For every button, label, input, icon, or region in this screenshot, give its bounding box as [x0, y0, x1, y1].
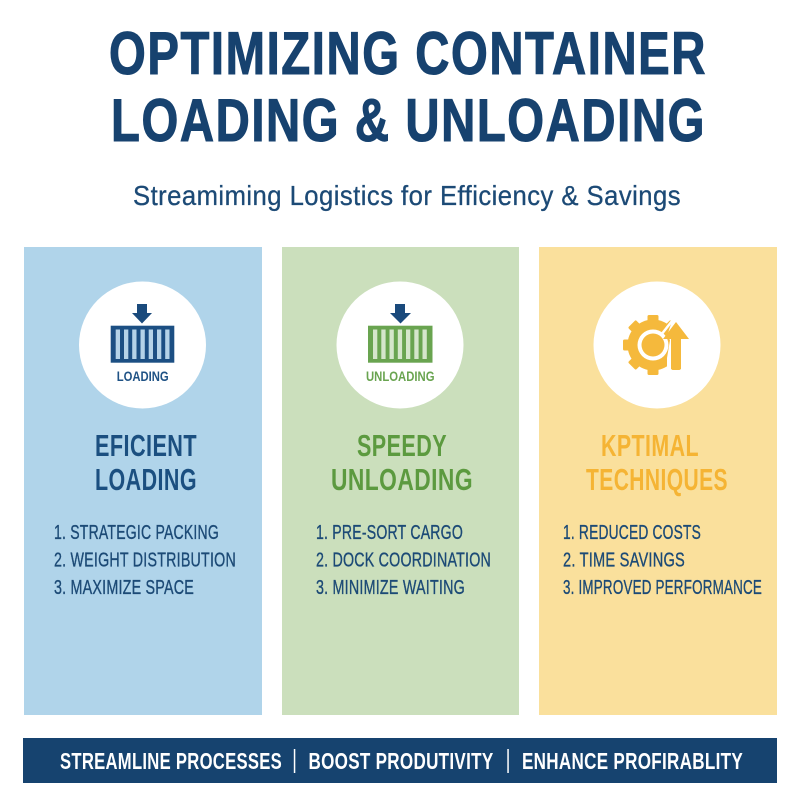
- icon: unloading container: UNLOADING: [366, 368, 435, 384]
- panel: speedy unloading: [282, 247, 519, 715]
- heading: speedy unloading: SPEEDY: [357, 429, 447, 463]
- icon: loading container: [79, 282, 206, 408]
- title: [109, 20, 707, 154]
- list: unloading steps: [316, 522, 491, 599]
- heading: optimal techniques: KPTIMAL: [601, 429, 699, 463]
- subtitle: Streamiming Logistics for Efficiency & Savings: [133, 180, 681, 211]
- list: optimal steps: [563, 522, 762, 599]
- icon: unloading container: [336, 282, 464, 408]
- list: unloading steps: 2. DOCK COORDINATION: [316, 550, 491, 572]
- heading: efficient loading: [95, 429, 197, 497]
- panel: efficient loading: [24, 247, 262, 715]
- icon: loading container: LOADING: [117, 368, 169, 384]
- banner: STREAMLINE PROCESSES: [60, 748, 282, 774]
- list: unloading steps: 3. MINIMIZE WAITING: [316, 577, 465, 599]
- banner: BOOST PRODUTIVITY: [308, 748, 494, 774]
- list: optimal steps: 1. REDUCED COSTS: [563, 522, 701, 544]
- list: loading steps: [54, 522, 236, 599]
- heading: speedy unloading: UNLOADING: [331, 463, 473, 497]
- list: unloading steps: 1. PRE-SORT CARGO: [316, 522, 463, 544]
- heading: optimal techniques: [586, 429, 728, 497]
- heading: efficient loading: LOADING: [95, 463, 197, 497]
- list: loading steps: 3. MAXIMIZE SPACE: [54, 577, 194, 599]
- heading: speedy unloading: [331, 429, 473, 497]
- icon: gear with arrow: [594, 282, 720, 408]
- heading: efficient loading: EFICIENT: [95, 429, 197, 463]
- banner: [23, 738, 777, 783]
- list: optimal steps: 2. TIME SAVINGS: [563, 550, 685, 572]
- heading: optimal techniques: TECHNIQUES: [586, 463, 728, 497]
- list: loading steps: 2. WEIGHT DISTRIBUTION: [54, 550, 236, 572]
- panel: optimal techniques: [539, 247, 777, 715]
- list: loading steps: 1. STRATEGIC PACKING: [54, 522, 219, 544]
